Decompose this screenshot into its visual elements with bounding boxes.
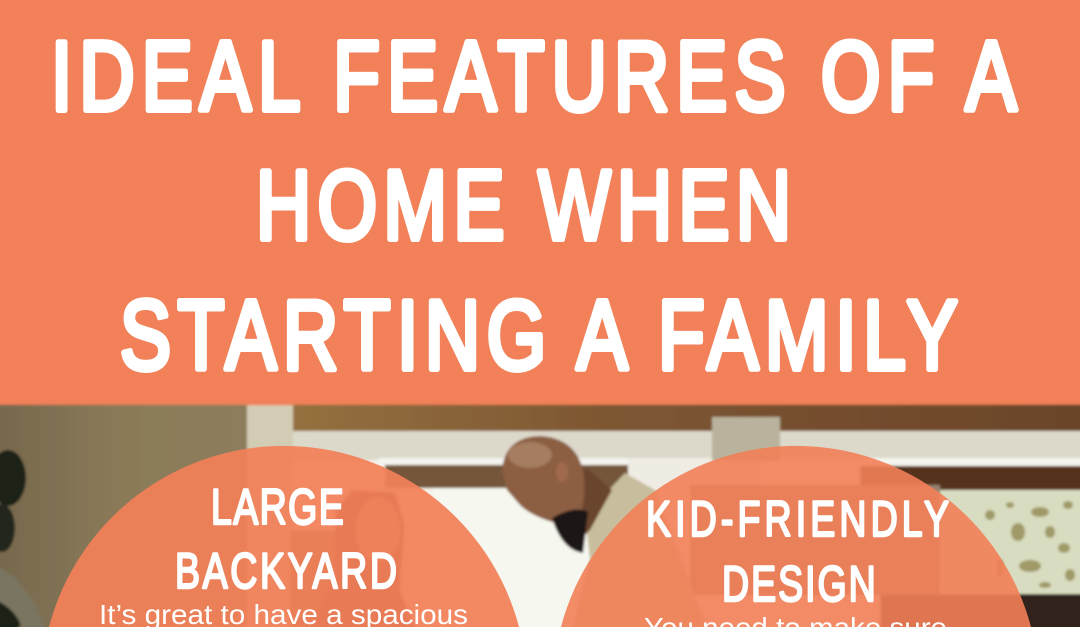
title: IDEAL FEATURES OF A [51, 21, 1017, 131]
plant leaves [0, 450, 26, 506]
pillar [247, 405, 293, 627]
garden window [940, 490, 1080, 594]
heading: large backyard: LARGE [211, 480, 344, 535]
man shirt [570, 473, 710, 627]
white tile wall [628, 458, 763, 518]
man neck [565, 465, 612, 545]
circle shape: large backyard [49, 446, 519, 627]
title banner background [0, 0, 1080, 405]
woman [310, 490, 420, 627]
man beard [552, 510, 588, 553]
window trim [378, 458, 1080, 464]
soffit [293, 431, 1080, 460]
heading: kid-friendly design: KID-FRIENDLY [646, 492, 949, 547]
door frame [290, 530, 385, 627]
window frames [385, 465, 630, 488]
title: HOME WHEN [256, 150, 791, 260]
ceiling pillar [712, 417, 780, 461]
circle shape: kid-friendly design [561, 446, 1031, 627]
circle: kid-friendly design [561, 446, 1031, 627]
heading: kid-friendly design: DESIGN [722, 557, 876, 612]
title: STARTING A FAMILY [120, 280, 958, 390]
wall [0, 405, 247, 627]
ceiling beam [293, 405, 1080, 431]
circle: large backyard [49, 446, 519, 627]
kitchen photo background [0, 405, 1080, 627]
title [51, 21, 1017, 390]
man head [502, 436, 584, 525]
garden foliage [985, 501, 1075, 588]
heading: kid-friendly design [646, 492, 949, 612]
man ear [556, 462, 568, 482]
kitchen cabinetry [690, 485, 940, 595]
heading: large backyard: BACKYARD [175, 544, 397, 599]
bright window [432, 488, 632, 627]
heading: large backyard [175, 480, 397, 599]
